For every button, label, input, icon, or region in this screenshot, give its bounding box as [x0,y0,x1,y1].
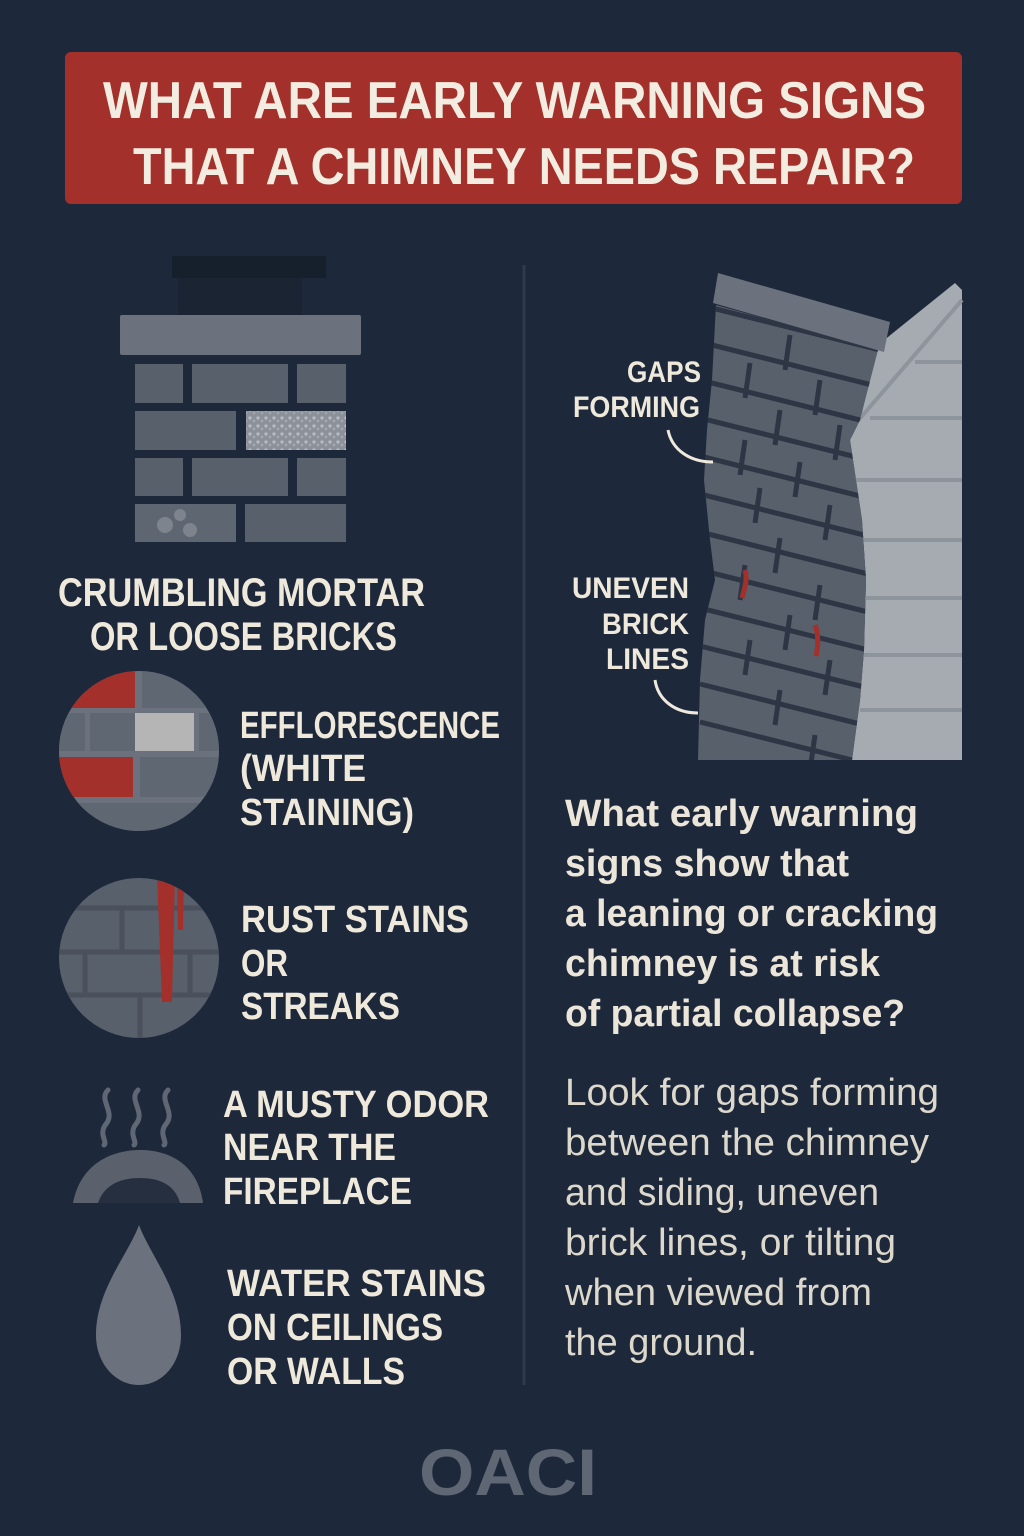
callout: uneven brick lines: LINES [606,643,689,676]
callout: uneven brick lines [572,572,698,713]
label: rust stains [241,899,469,1028]
label: water stains [227,1263,486,1393]
icon: crumbling chimney [120,256,361,542]
callout: gaps forming: FORMING [573,391,700,424]
icon: efflorescence circle [59,671,219,831]
title banner [65,52,962,204]
label: efflorescence: STAINING) [240,792,414,834]
callout: gaps forming: GAPS [627,356,701,389]
label: efflorescence [240,705,500,834]
question text: What early warning [565,793,918,835]
callout: gaps forming [573,356,713,462]
answer text: Look for gaps forming [565,1072,939,1114]
callout: uneven brick lines: UNEVEN [572,572,689,605]
label: water stains: ON CEILINGS [227,1307,443,1349]
label: rust stains: OR [241,943,288,985]
question text: chimney is at risk [565,943,881,985]
label: water stains: OR WALLS [227,1351,405,1393]
question text: a leaning or cracking [565,893,938,935]
label: musty odor: A MUSTY ODOR [223,1084,489,1126]
title banner: WHAT ARE EARLY WARNING SIGNS [103,72,926,130]
answer text [564,1072,939,1364]
illustration: leaning chimney with siding [698,273,962,772]
label: musty odor [223,1084,489,1213]
icon: musty odor [73,1090,203,1203]
label: crumbling mortar: CRUMBLING MORTAR [58,571,425,615]
icon: water drop [96,1225,181,1385]
label: rust stains: STREAKS [241,986,400,1028]
question text: of partial collapse? [565,993,905,1035]
question text: signs show that [565,843,849,885]
answer text: and siding, uneven [565,1172,879,1214]
answer text: brick lines, or tilting [565,1222,896,1264]
divider line [522,265,526,1385]
label: water stains: WATER STAINS [227,1263,486,1305]
label: crumbling mortar: OR LOOSE BRICKS [90,615,397,659]
logo: OACI: OACI [419,1435,597,1509]
answer text: when viewed from [564,1272,872,1314]
callout: uneven brick lines: BRICK [602,608,689,641]
answer text: the ground. [565,1322,757,1364]
icon: rust stain circle [59,878,219,1038]
label: rust stains: RUST STAINS [241,899,469,941]
label: efflorescence: (WHITE [240,748,366,790]
label: musty odor: NEAR THE [223,1127,396,1169]
label: crumbling mortar [58,571,425,659]
question text [565,793,938,1035]
answer text: between the chimney [565,1122,929,1164]
label: musty odor: FIREPLACE [223,1171,412,1213]
title banner: THAT A CHIMNEY NEEDS REPAIR? [133,138,915,196]
label: efflorescence: EFFLORESCENCE [240,705,500,747]
